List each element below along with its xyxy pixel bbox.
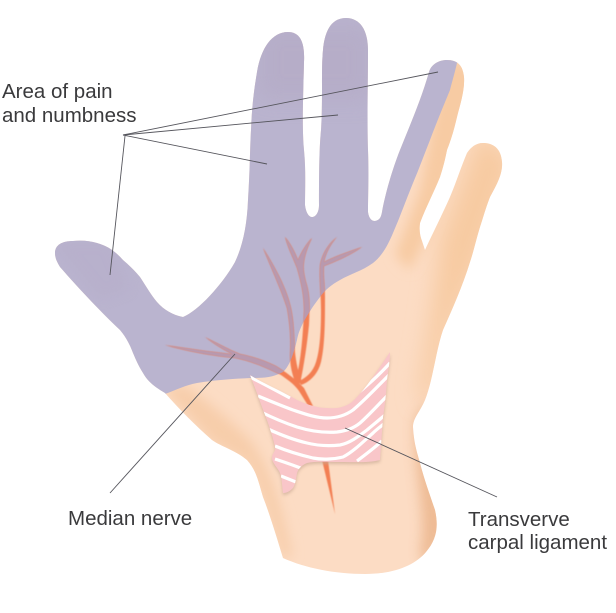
leader line: transverse carpal ligament [345,428,497,497]
hand skin [55,18,515,574]
label: transverve carpal ligament [468,508,607,554]
label: area of pain and numbness: and numbness [2,104,136,127]
label: median nerve: Median nerve [68,507,192,530]
label: area of pain and numbness [2,80,136,127]
median nerve in numb area [170,238,360,374]
numb area: purple shading [55,18,458,394]
median nerve orange part [165,237,362,514]
leader lines: area of pain [110,72,438,275]
label: area of pain and numbness: Area of pain [2,80,113,103]
label: transverve carpal ligament: carpal ligament [468,531,607,554]
leader line: median nerve [110,354,235,493]
transverse carpal ligament [250,352,391,496]
label: transverve carpal ligament: Transverve [468,508,570,531]
hand illustration [30,10,515,574]
